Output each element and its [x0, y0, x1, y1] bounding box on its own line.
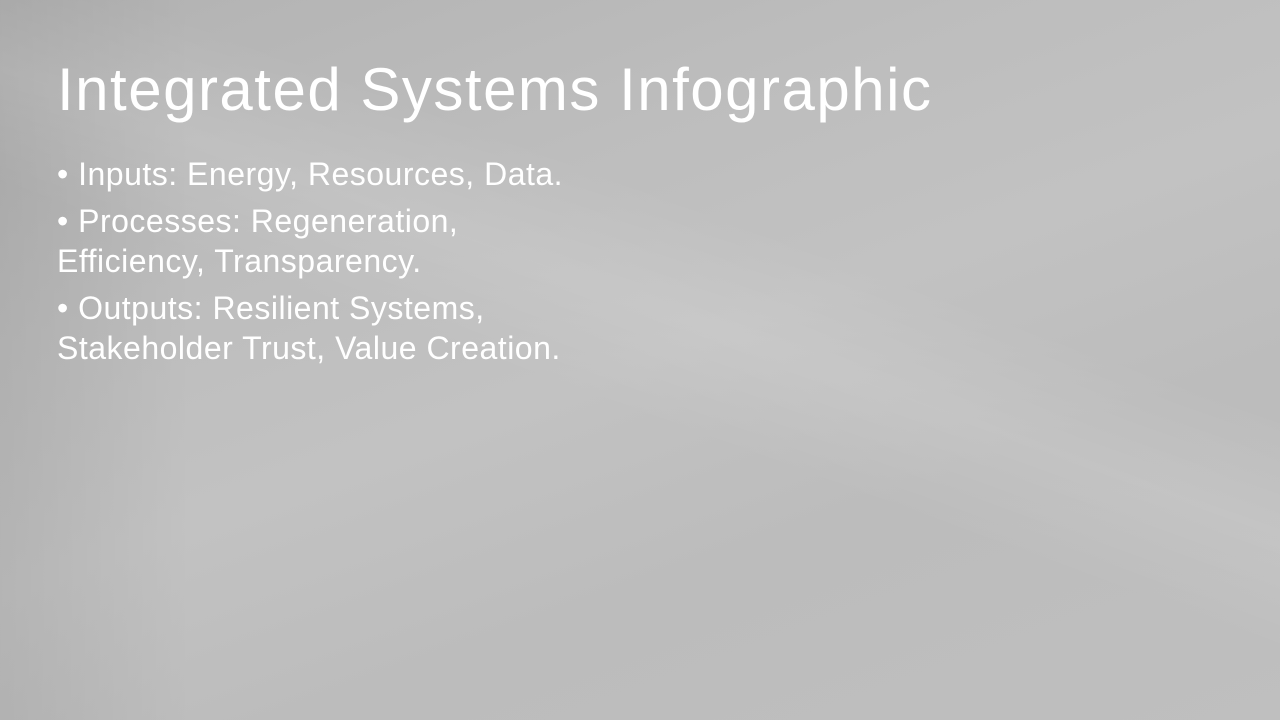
- bullet: processes: Efficiency, Transparency.: [57, 243, 422, 279]
- bullet: outputs: Stakeholder Trust, Value Creation.: [57, 330, 561, 366]
- bullet: processes: • Processes: Regeneration,: [57, 203, 458, 239]
- bullet: processes: [57, 203, 458, 279]
- title: Integrated Systems Infographic: [57, 56, 932, 123]
- bullet: inputs: • Inputs: Energy, Resources, Data.: [57, 156, 563, 192]
- bullet: outputs: [57, 290, 561, 366]
- bullet: outputs: • Outputs: Resilient Systems,: [57, 290, 485, 326]
- bullet list: [57, 156, 563, 366]
